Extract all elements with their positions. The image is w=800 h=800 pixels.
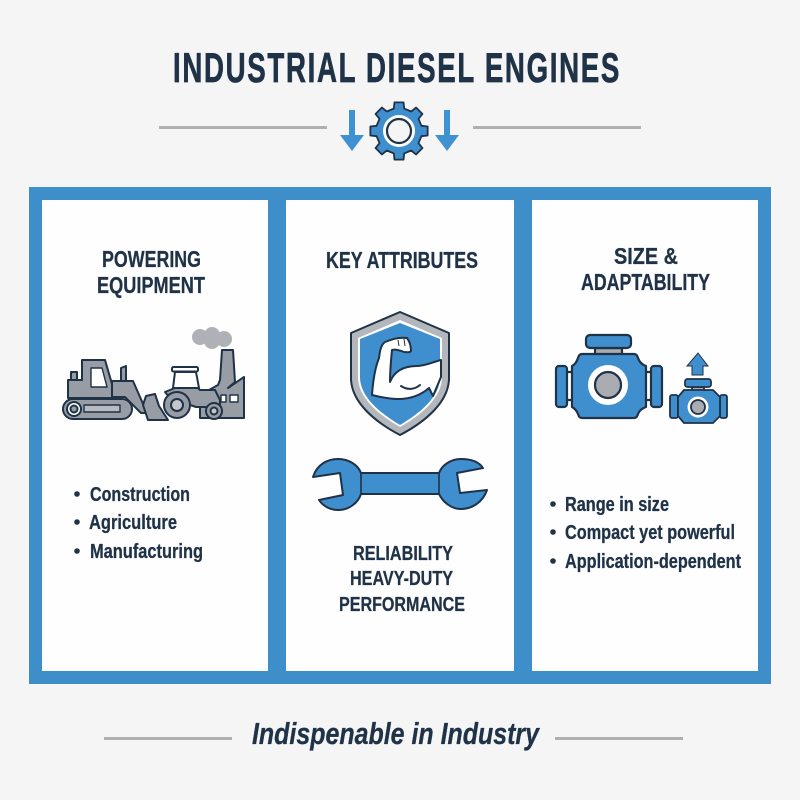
bullet list: size: Compact yet powerful [565, 522, 735, 544]
icon: machinery and factory [63, 327, 244, 420]
icon: shield with flexed arm [351, 312, 449, 435]
icon: small engine [670, 379, 727, 423]
bullet list: sectors: Construction [90, 484, 190, 506]
panel: powering equipment [42, 200, 268, 671]
bullet list: size: Range in size [565, 494, 669, 516]
panel card left [42, 200, 268, 671]
icon: wrench [313, 459, 487, 510]
bullet list: size: Application-dependent [565, 551, 741, 573]
panel: size and adaptability [532, 200, 758, 671]
text: attributes: HEAVY-DUTY [350, 567, 453, 590]
heading: powering equipment: EQUIPMENT [97, 272, 205, 298]
text: attributes [339, 542, 465, 616]
bulldozer [68, 360, 112, 398]
heading: size and adaptability: SIZE & [614, 243, 678, 269]
heading: size and adaptability [581, 243, 710, 295]
panel card right [532, 200, 758, 671]
heading: key attributes: KEY ATTRIBUTES [326, 247, 478, 273]
panel: key attributes [286, 200, 514, 671]
text: attributes: RELIABILITY [353, 542, 453, 565]
bullet list: sectors: Agriculture [89, 512, 177, 534]
factory [200, 350, 244, 418]
bullet list: sectors [74, 484, 203, 563]
blue frame [29, 187, 771, 684]
heading: size and adaptability: ADAPTABILITY [581, 269, 710, 295]
heading: powering equipment: POWERING [102, 246, 201, 272]
tagline: Indispenable in Industry [252, 716, 540, 751]
bullet list: sectors: Manufacturing [90, 541, 203, 563]
tractor [165, 388, 220, 407]
heading: powering equipment [97, 246, 205, 298]
icon: right down arrow [435, 110, 459, 151]
icon: large engine [556, 335, 662, 418]
bullet list: size [550, 494, 741, 573]
text: attributes: PERFORMANCE [339, 593, 465, 616]
icon: up arrow [687, 353, 708, 375]
panel card middle [286, 200, 514, 671]
icon: left down arrow [340, 110, 364, 151]
icon: gear [370, 102, 428, 160]
smoke cloud [192, 327, 232, 349]
